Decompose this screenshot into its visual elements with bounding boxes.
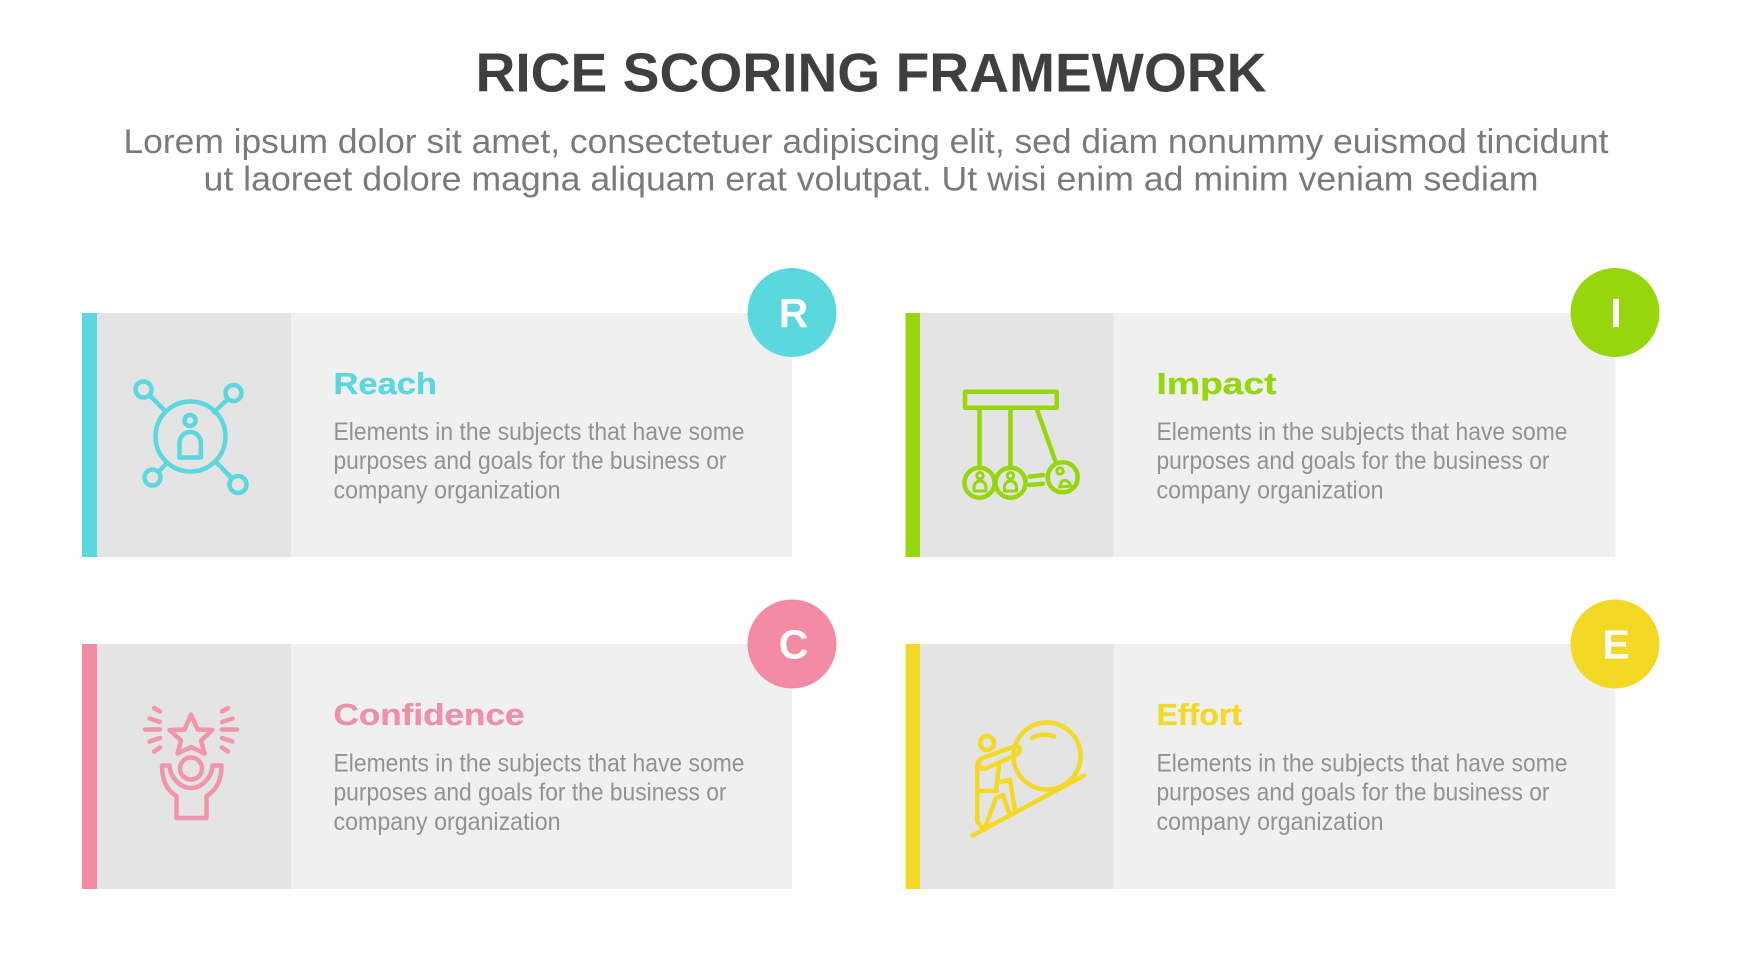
- icon: person pushing boulder: [972, 722, 1084, 836]
- heading: reach: Reach: [334, 366, 437, 401]
- badge: R: R: [779, 290, 808, 336]
- badge: C: C: [779, 622, 808, 668]
- description: reach: company organization: [334, 476, 560, 504]
- heading: impact: Impact: [1156, 366, 1276, 401]
- badge: I: I: [1610, 290, 1622, 336]
- description: reach: Elements in the subjects that have some: [334, 418, 744, 446]
- subtitle text: [124, 123, 1609, 198]
- heading: confidence: Confidence: [334, 697, 524, 732]
- description: impact: purposes and goals for the business or: [1156, 447, 1550, 475]
- badge: E: [1570, 600, 1660, 688]
- panel: reach: [82, 268, 836, 557]
- panel: impact: [906, 268, 1660, 557]
- description: effort: Elements in the subjects that have some: [1156, 750, 1568, 778]
- description: confidence: Elements in the subjects that have some: [334, 750, 744, 778]
- icon: hands raising star: [145, 708, 237, 818]
- subtitle text: Lorem ipsum dolor sit amet, consectetuer adipiscing elit, sed diam nonummy euismod tincidunt: [124, 123, 1609, 161]
- description: confidence: [334, 750, 744, 836]
- description: impact: company organization: [1156, 476, 1384, 504]
- description: effort: [1156, 750, 1568, 836]
- description: confidence: purposes and goals for the business or: [334, 778, 726, 806]
- description: confidence: company organization: [334, 808, 560, 836]
- heading: effort: Effort: [1156, 697, 1242, 732]
- description: impact: [1156, 418, 1568, 504]
- icon: newton cradle: [964, 392, 1078, 498]
- description: effort: company organization: [1156, 808, 1384, 836]
- badge: R: [748, 268, 836, 357]
- badge: C: [748, 600, 836, 688]
- badge: E: E: [1602, 622, 1630, 668]
- icon: network person: [136, 382, 246, 493]
- panel: confidence: [82, 600, 836, 889]
- subtitle text: ut laoreet dolore magna aliquam erat volutpat. Ut wisi enim ad minim veniam sediam: [204, 160, 1538, 198]
- description: reach: [334, 418, 744, 504]
- description: reach: purposes and goals for the business or: [334, 447, 726, 475]
- title: RICE SCORING FRAMEWORK: [476, 42, 1267, 104]
- description: impact: Elements in the subjects that have some: [1156, 418, 1568, 446]
- panel: effort: [906, 600, 1660, 889]
- badge: I: [1570, 268, 1660, 357]
- description: effort: purposes and goals for the business or: [1156, 778, 1550, 806]
